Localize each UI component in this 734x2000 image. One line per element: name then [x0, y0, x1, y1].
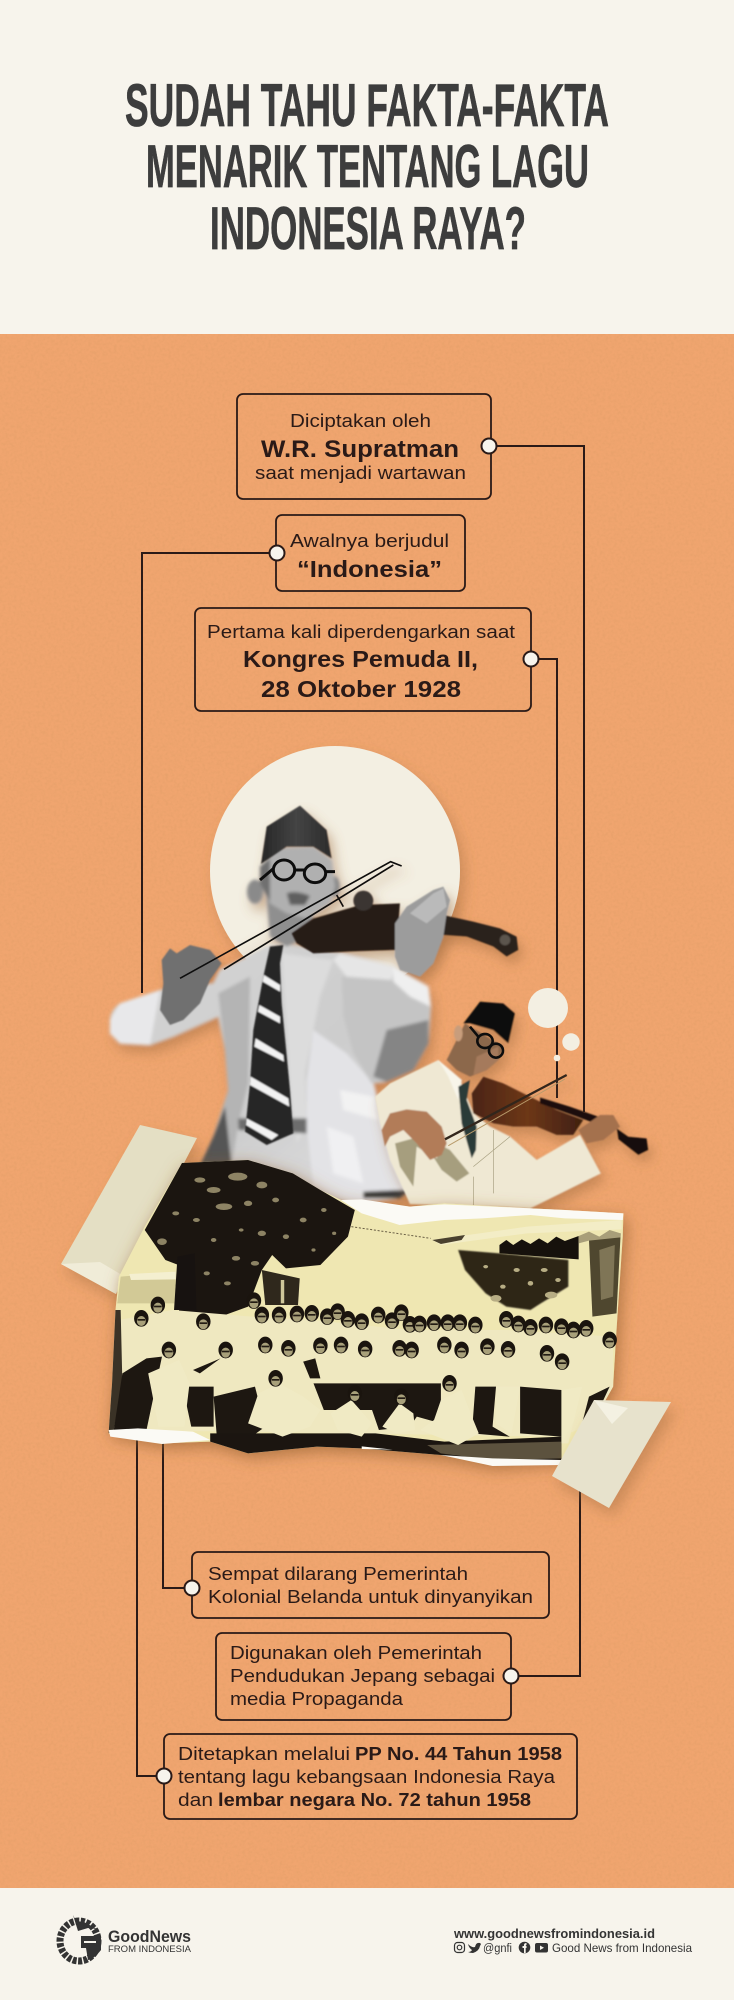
statue ears [247, 880, 263, 904]
portrait collar [438, 1060, 462, 1100]
torn white edge top [341, 1199, 623, 1225]
torn white edge bottom right [441, 1455, 561, 1466]
box: Ditetapkan PP No. 44: Ditetapkan melalui [178, 1743, 350, 1764]
portrait jacket [375, 1060, 601, 1208]
tree left canopy [145, 1160, 355, 1317]
background: textured orange panel [0, 334, 734, 1888]
portrait of young Supratman [375, 1002, 648, 1208]
box: Awalnya berjudul Indonesia [270, 515, 465, 591]
box: Diciptakan oleh W.R. Supratman: W.R. Supratman [261, 436, 459, 463]
statue left jacket panel [200, 977, 250, 1167]
torn historical photo of Kongres Pemuda [109, 1160, 623, 1466]
box: Sempat dilarang: Sempat dilarang Pemerintah [208, 1563, 468, 1584]
seated and front figures [148, 1360, 582, 1445]
portrait tie [458, 1080, 477, 1158]
statue jacket [110, 945, 431, 1203]
crowd clothing [114, 1310, 613, 1437]
title [125, 72, 609, 262]
building wall right [589, 1233, 621, 1317]
dark ground [210, 1433, 561, 1465]
statue neck [267, 897, 313, 947]
statue left hand [160, 945, 222, 1025]
statue cap [261, 806, 332, 864]
thought bubbles [528, 988, 580, 1061]
box: Diciptakan oleh W.R. Supratman: saat menjadi wartawan [255, 462, 466, 483]
icon: twitter [468, 1943, 481, 1953]
tree right [458, 1250, 568, 1310]
statue of W.R. Supratman [110, 806, 518, 1203]
connector lines [137, 446, 584, 1776]
box: Awalnya berjudul Indonesia: “Indonesia” [297, 556, 442, 582]
statue shirt [282, 953, 333, 1143]
building roof [432, 1220, 622, 1245]
background: footer band [0, 1888, 734, 2000]
footer website and social links: @gnfi [483, 1943, 512, 1955]
photo paper [109, 1160, 623, 1465]
footer website and social links: Good News from Indonesia [552, 1941, 692, 1955]
statue violin [292, 903, 400, 953]
box: Ditetapkan PP No. 44: PP No. 44 Tahun 1958 [355, 1743, 562, 1764]
portrait hands [382, 1109, 447, 1160]
icon: youtube [535, 1943, 548, 1952]
footer website and social links [453, 1926, 692, 1955]
box: Digunakan oleh Jepang: Pendudukan Jepang sebagai [230, 1665, 495, 1686]
statue right panel [307, 1030, 412, 1202]
logo: GoodNews from Indonesia: FROM INDONESIA [108, 1944, 191, 1954]
statue belt [238, 1118, 307, 1133]
crowd heads [134, 1292, 617, 1405]
icon: facebook [519, 1942, 530, 1953]
cream circle behind statue [210, 746, 460, 996]
icon: instagram [454, 1942, 464, 1952]
box: Diciptakan oleh W.R. Supratman: Diciptakan oleh [290, 410, 431, 431]
statue bow [180, 862, 402, 978]
box: Digunakan oleh Jepang: media Propaganda [230, 1688, 404, 1709]
dotted wall ledge [351, 1227, 431, 1238]
portrait shadow patch [395, 1138, 469, 1187]
box: Digunakan oleh Jepang: Digunakan oleh Pemerintah [230, 1642, 482, 1663]
torn white edge bottom left [109, 1428, 210, 1444]
background: top title band [0, 0, 734, 334]
box: Kongres Pemuda II: 28 Oktober 1928 [261, 676, 461, 702]
wall window [262, 1270, 300, 1305]
portrait face [447, 1023, 503, 1077]
left edge shadow [109, 1310, 122, 1433]
box: Ditetapkan PP No. 44: dan [178, 1789, 213, 1810]
statue hem [363, 1189, 412, 1198]
building awning scallops [499, 1236, 579, 1259]
statue sleeve [342, 977, 430, 1083]
box: Kongres Pemuda II: Pertama kali diperdengarkan saat [207, 621, 515, 642]
paper tape top left [61, 1125, 197, 1294]
statue glasses [260, 860, 335, 883]
portrait jacket folds [473, 1130, 510, 1207]
portrait violin [472, 1077, 583, 1135]
small building left [117, 1272, 177, 1303]
box: Diciptakan oleh W.R. Supratman [237, 394, 496, 499]
box: Kongres Pemuda II [195, 608, 538, 711]
portrait bow [445, 1075, 567, 1139]
dark furniture and plants [114, 1357, 610, 1447]
portrait glasses [470, 1027, 503, 1058]
footer website and social links: www.goodnewsfromindonesia.id [453, 1926, 655, 1941]
logo: GoodNews from Indonesia [60, 1915, 191, 1961]
statue tie [245, 945, 293, 1145]
portrait cap [463, 1002, 515, 1043]
statue face [260, 847, 335, 918]
box: Sempat dilarang [184, 1552, 549, 1618]
box: Ditetapkan PP No. 44: lembar negara No. 72 tahun 1958 [218, 1789, 531, 1810]
box: Ditetapkan PP No. 44 [156, 1734, 577, 1819]
statue right hand [395, 887, 450, 977]
box: Ditetapkan PP No. 44: tentang lagu kebangsaan Indonesia Raya [178, 1766, 556, 1787]
icon: garuda ring [60, 1915, 101, 1961]
box: Sempat dilarang: Kolonial Belanda untuk dinyanyikan [208, 1586, 533, 1607]
box: Digunakan oleh Jepang [216, 1633, 518, 1720]
logo: GoodNews from Indonesia: GoodNews [108, 1927, 191, 1946]
box: Kongres Pemuda II: Kongres Pemuda II, [243, 646, 478, 672]
paper tape bottom right [552, 1400, 671, 1508]
box: Awalnya berjudul Indonesia: Awalnya berjudul [290, 530, 449, 551]
statue cuffs [393, 967, 431, 1007]
